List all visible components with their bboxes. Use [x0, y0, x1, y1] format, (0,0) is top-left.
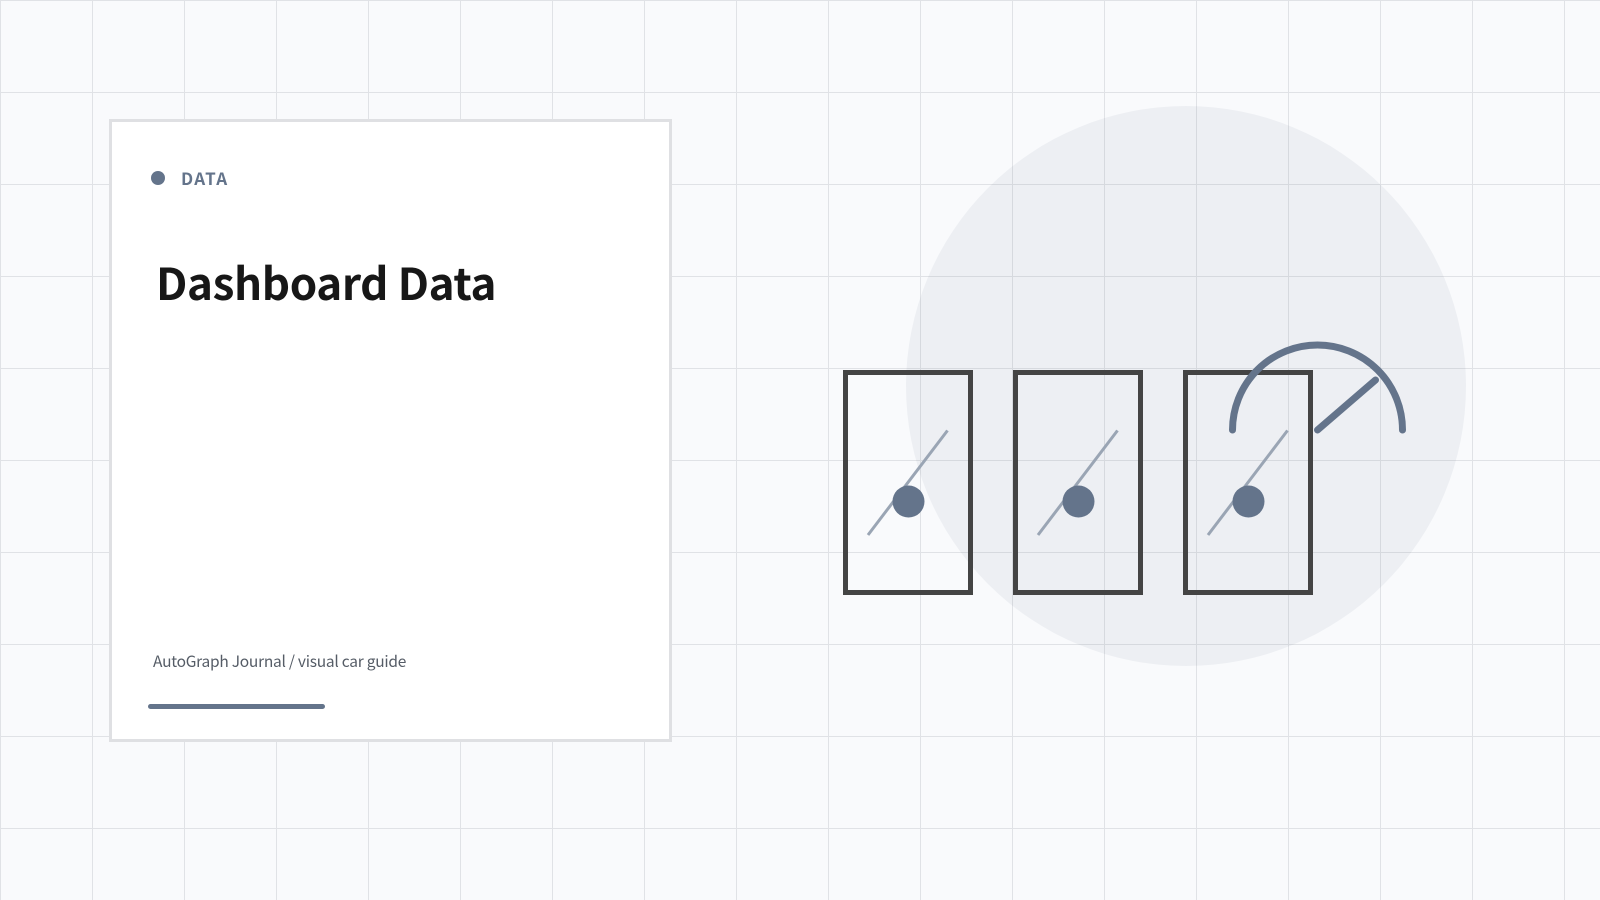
- panel: title card: [109, 119, 672, 742]
- icon: third dashboard gauge panel: [1186, 372, 1310, 592]
- icon: category dot: [150, 170, 164, 184]
- large background circle: [906, 106, 1466, 666]
- accent bar: [148, 704, 325, 709]
- icon: second dashboard gauge panel: [1016, 372, 1140, 592]
- icon: first dashboard gauge panel: [846, 372, 970, 592]
- icon: speedometer arc and needle: [1232, 345, 1402, 430]
- title: Dashboard Data: [156, 249, 496, 313]
- footer credit: AutoGraph Journal / visual car guide: [153, 650, 406, 672]
- category label: DATA: [181, 165, 228, 190]
